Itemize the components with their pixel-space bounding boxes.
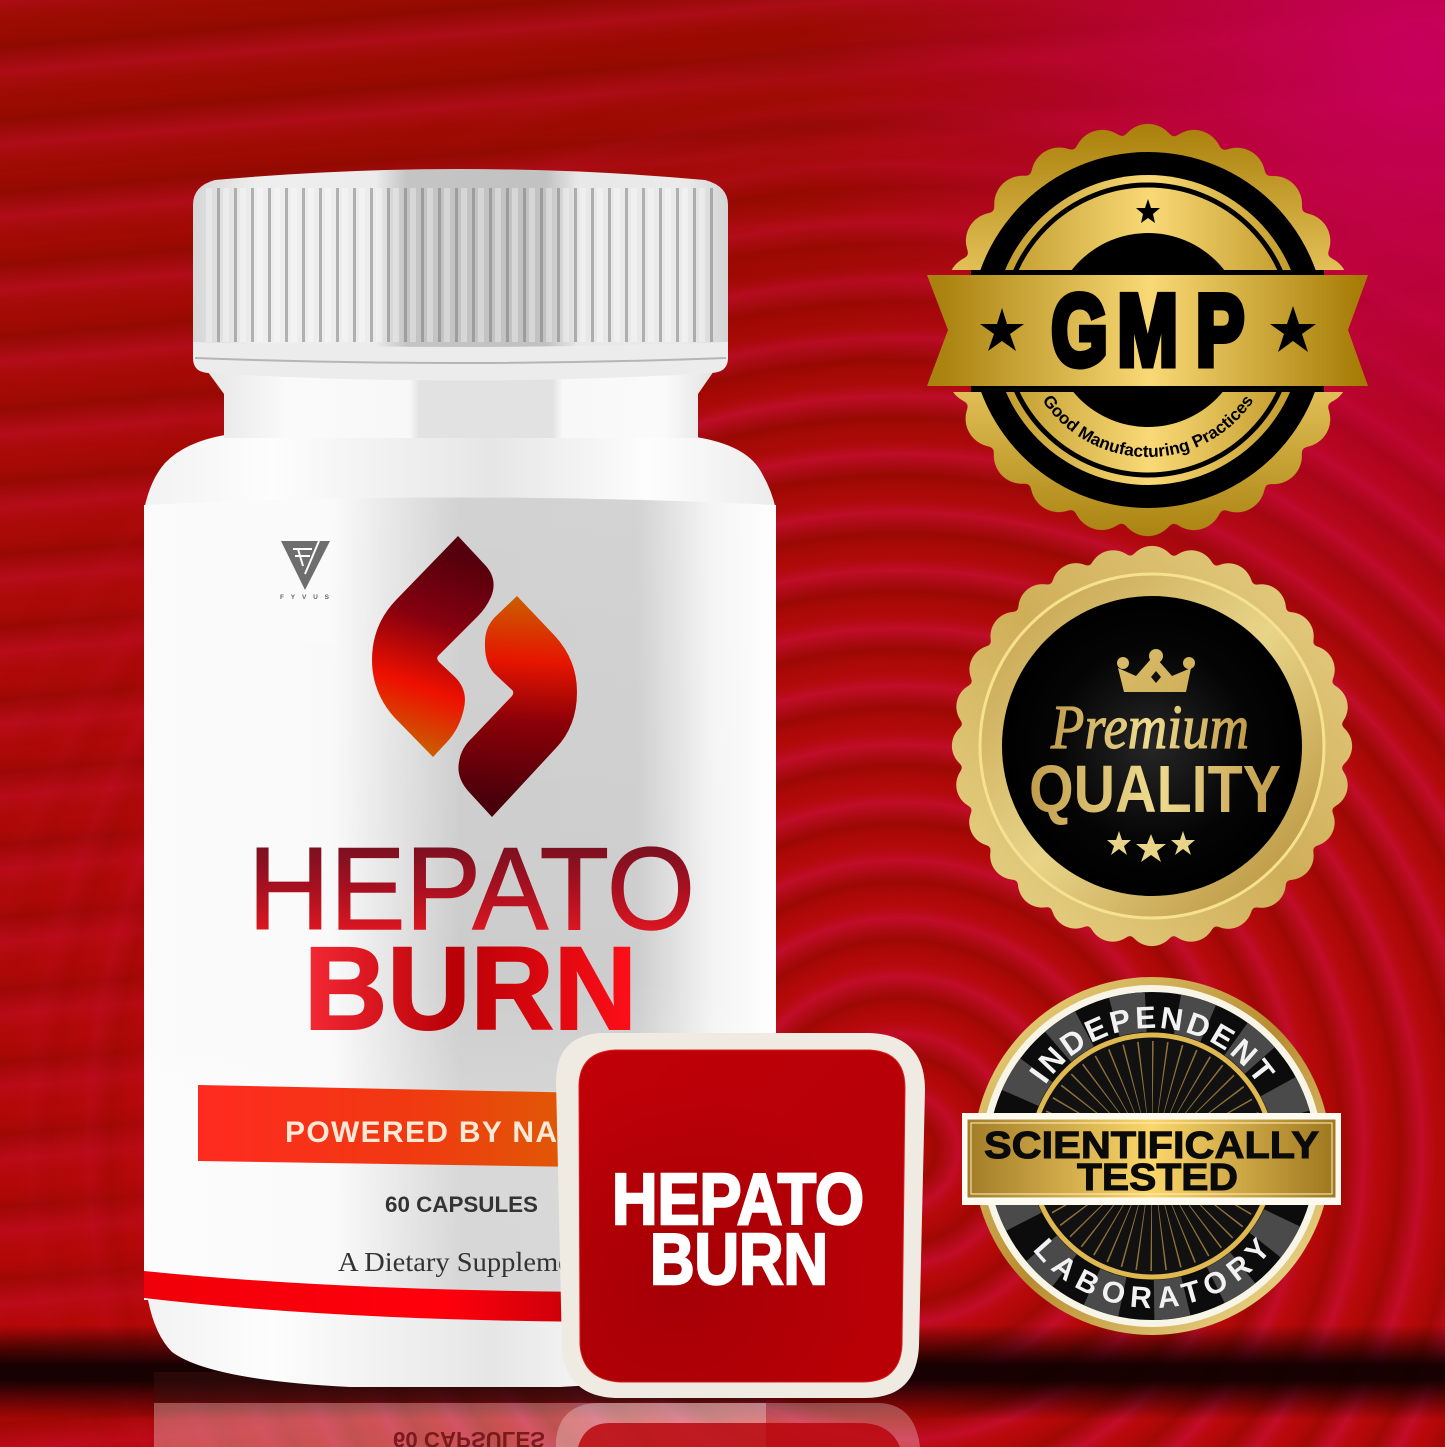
premium gold rings xyxy=(980,574,1324,918)
GMP heading: M xyxy=(1117,273,1178,387)
product bottle xyxy=(144,169,776,1387)
bottle label panel xyxy=(144,498,776,1300)
red label stripe xyxy=(144,1271,640,1322)
Premium script: Premium xyxy=(1050,694,1249,762)
lab curved footer: LABORATORY xyxy=(1034,1236,1266,1308)
GMP black bars by ribbon xyxy=(971,270,1324,392)
box text: BURN: BURN xyxy=(650,1220,828,1300)
icon: crown xyxy=(1117,649,1195,692)
badge: Premium Quality seal xyxy=(976,570,1328,922)
orange tagline band: POWERED BY NA xyxy=(285,1116,557,1149)
box red face xyxy=(579,1050,905,1382)
brand mark: FYVUS xyxy=(280,541,332,601)
three stars xyxy=(1107,831,1195,862)
capsule count: 60 CAPSULES xyxy=(385,1192,538,1217)
lab sunburst rays xyxy=(1082,1086,1222,1226)
GMP ribbon xyxy=(927,275,1368,386)
plaque text: SCIENTIFICALLY: SCIENTIFICALLY xyxy=(984,1125,1319,1167)
floor shadow band xyxy=(0,1325,1445,1420)
product pouch: square red box xyxy=(556,1033,925,1398)
GMP curved caption: Good Manufacturing Practices xyxy=(1044,396,1252,458)
dietary supplement line: A Dietary Supplement xyxy=(338,1247,594,1277)
box ivory frame xyxy=(556,1033,925,1398)
logo: flame S mark xyxy=(372,536,577,817)
lab black ring xyxy=(988,992,1316,1320)
brand mark: FYVUS: FYVUS xyxy=(280,594,332,601)
GMP heading: G xyxy=(1051,273,1108,387)
box text: HEPATO: HEPATO xyxy=(612,1160,864,1240)
lab curved heading: INDEPENDENT xyxy=(1029,1006,1276,1084)
premium scalloped edge xyxy=(976,570,1328,922)
product name: HEPATO: HEPATO xyxy=(248,823,695,954)
premium black disc xyxy=(1002,596,1302,896)
lab inner circle xyxy=(1031,1035,1273,1277)
orange tagline band xyxy=(198,1085,640,1168)
QUALITY heading: QUALITY xyxy=(1029,752,1281,827)
bottle neck xyxy=(205,368,716,438)
product reflection on the floor xyxy=(154,1372,920,1447)
GMP scalloped edge xyxy=(970,152,1326,508)
GMP top star xyxy=(1136,199,1160,223)
badge: GMP seal xyxy=(927,124,1368,536)
lab gold rim xyxy=(973,977,1331,1335)
product name: BURN: BURN xyxy=(304,923,637,1055)
bottle shoulder and base xyxy=(144,435,776,1387)
GMP ribbon stars xyxy=(980,306,1316,352)
lab plaque xyxy=(962,1113,1341,1205)
GMP heading: P xyxy=(1196,273,1244,387)
badge: Independent Laboratory seal xyxy=(962,977,1341,1335)
bottle cap xyxy=(193,169,728,380)
plaque text: TESTED: TESTED xyxy=(1077,1157,1238,1199)
